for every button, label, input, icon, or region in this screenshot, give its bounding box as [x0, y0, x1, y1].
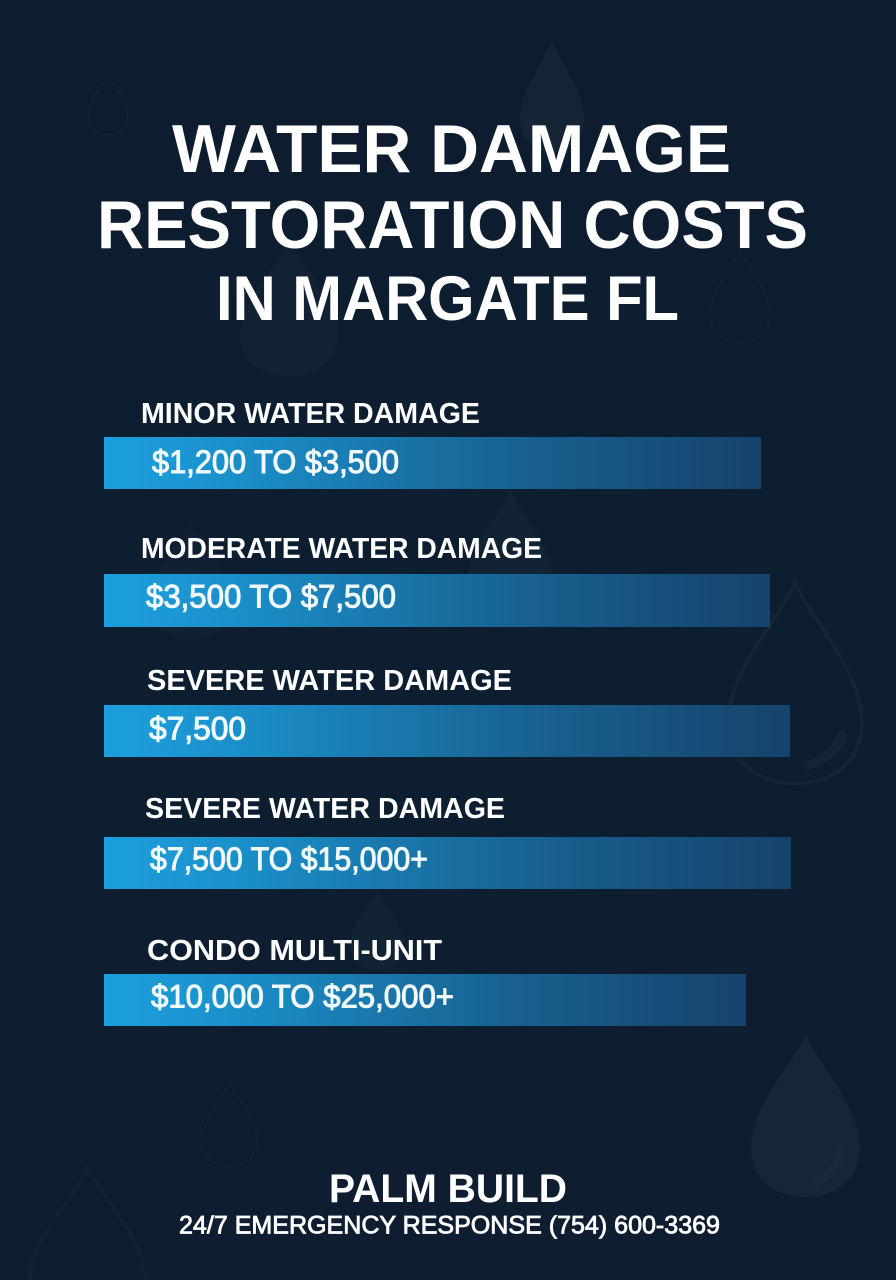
tier: severe water damage range: SEVERE WATER DAMAGE	[145, 793, 505, 825]
title: WATER DAMAGE	[172, 111, 731, 187]
tier: minor water damage	[104, 398, 761, 489]
tier: moderate water damage	[104, 533, 770, 627]
tier: minor water damage: MINOR WATER DAMAGE	[141, 398, 480, 430]
tier: moderate water damage: $3,500 TO $7,500	[146, 578, 396, 614]
tier: severe water damage: SEVERE WATER DAMAGE	[147, 665, 512, 697]
tier: condo multi-unit: CONDO MULTI-UNIT	[147, 935, 442, 967]
tier: severe water damage range	[104, 793, 791, 889]
footer: 24/7 EMERGENCY RESPONSE (754) 600-3369	[179, 1212, 720, 1240]
footer: PALM BUILD	[329, 1167, 567, 1211]
tier: severe water damage	[104, 665, 790, 757]
tier: condo multi-unit	[104, 935, 746, 1026]
footer	[179, 1167, 720, 1240]
title: RESTORATION COSTS	[97, 187, 808, 263]
tier: condo multi-unit: $10,000 TO $25,000+	[151, 978, 454, 1014]
tier: moderate water damage: MODERATE WATER DAMAGE	[141, 533, 542, 565]
tier: severe water damage range: $7,500 TO $15,000+	[150, 841, 428, 877]
tier: severe water damage: $7,500	[149, 710, 246, 746]
title	[97, 111, 808, 334]
title: IN MARGATE FL	[216, 264, 679, 334]
tier: minor water damage: $1,200 TO $3,500	[152, 444, 399, 480]
